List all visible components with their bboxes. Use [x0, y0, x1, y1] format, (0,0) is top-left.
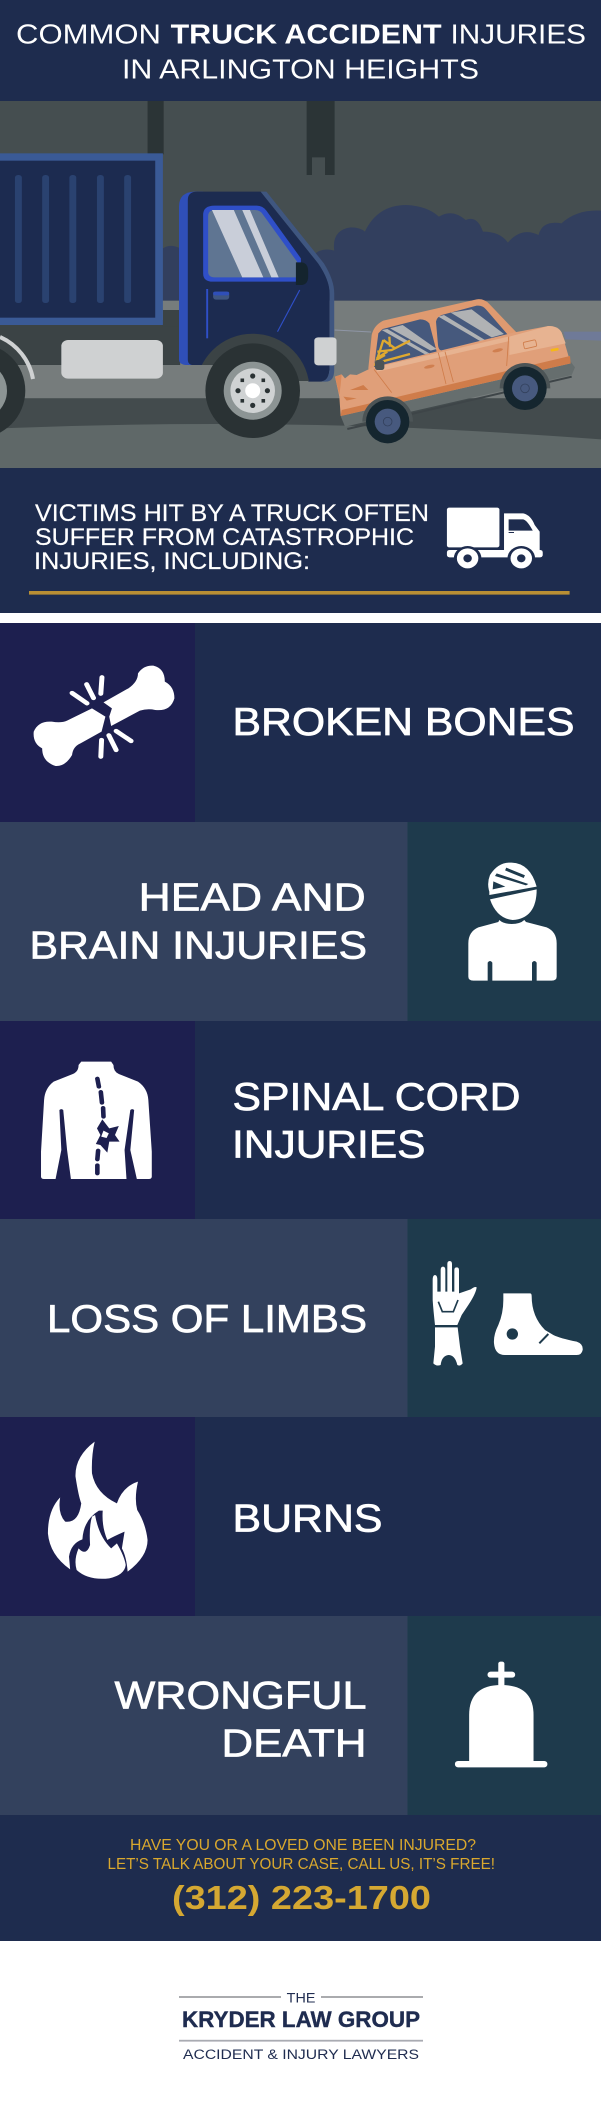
- label: head and brain injuries: [30, 877, 367, 968]
- label: burns: BURNS: [232, 1498, 382, 1541]
- call to action text: HAVE YOU OR A LOVED ONE BEEN INJURED?: [130, 1837, 476, 1854]
- label: wrongful death: [114, 1675, 366, 1766]
- label: spinal cord injuries: SPINAL CORD: [232, 1076, 520, 1119]
- logo: the kryder law group: ACCIDENT & INJURY LAWYERS: [183, 2047, 419, 2062]
- intro text: INJURIES, INCLUDING:: [34, 549, 310, 575]
- panel: intro: [0, 468, 601, 613]
- panel: call to action: [0, 1815, 601, 1941]
- panel: spinal cord injuries: [0, 1021, 601, 1219]
- label: head and brain injuries: BRAIN INJURIES: [30, 925, 367, 968]
- panel: head and brain injuries: [0, 822, 601, 1021]
- label: broken bones: BROKEN BONES: [232, 701, 574, 744]
- label: spinal cord injuries: INJURIES: [232, 1124, 426, 1167]
- phone number: (312) 223-1700: [172, 1879, 431, 1916]
- label: spinal cord injuries: [232, 1076, 520, 1167]
- truck wheels: [0, 334, 310, 448]
- title: TRUCK ACCIDENT: [171, 18, 442, 50]
- icon: delivery truck: [447, 508, 543, 571]
- title: INJURIES: [450, 18, 586, 50]
- call to action text: LET’S TALK ABOUT YOUR CASE, CALL US, IT’S FREE!: [108, 1856, 495, 1873]
- panel: wrongful death: [0, 1616, 601, 1815]
- damaged car: [335, 299, 575, 447]
- call to action text: [108, 1837, 495, 1873]
- truck: [0, 153, 337, 382]
- logo: the kryder law group: [179, 1990, 423, 2062]
- icon: hand and foot prosthetics: [433, 1261, 583, 1366]
- title: COMMON: [16, 18, 161, 50]
- label: head and brain injuries: HEAD AND: [139, 877, 366, 920]
- icon: gravestone: [455, 1662, 547, 1767]
- icon: bandaged head: [468, 863, 557, 981]
- icon: spine injury: [41, 1062, 152, 1179]
- logo: the kryder law group: THE: [287, 1990, 315, 2006]
- intro text: [34, 501, 429, 575]
- panel: header: [0, 0, 601, 101]
- illustration: truck hitting car: [0, 101, 601, 468]
- intro text: SUFFER FROM CATASTROPHIC: [35, 525, 414, 551]
- panel: broken bones: [0, 623, 601, 822]
- icon: flame: [48, 1442, 148, 1579]
- intro text: VICTIMS HIT BY A TRUCK OFTEN: [35, 501, 429, 527]
- logo: the kryder law group: KRYDER LAW GROUP: [182, 2007, 420, 2032]
- label: wrongful death: DEATH: [222, 1723, 366, 1766]
- icon: broken bone: [34, 666, 174, 766]
- panel: loss of limbs: [0, 1219, 601, 1417]
- label: loss of limbs: LOSS OF LIMBS: [47, 1298, 367, 1341]
- panel: burns: [0, 1417, 601, 1616]
- label: wrongful death: WRONGFUL: [114, 1675, 366, 1718]
- title: [16, 18, 586, 85]
- title: IN ARLINGTON HEIGHTS: [122, 54, 479, 85]
